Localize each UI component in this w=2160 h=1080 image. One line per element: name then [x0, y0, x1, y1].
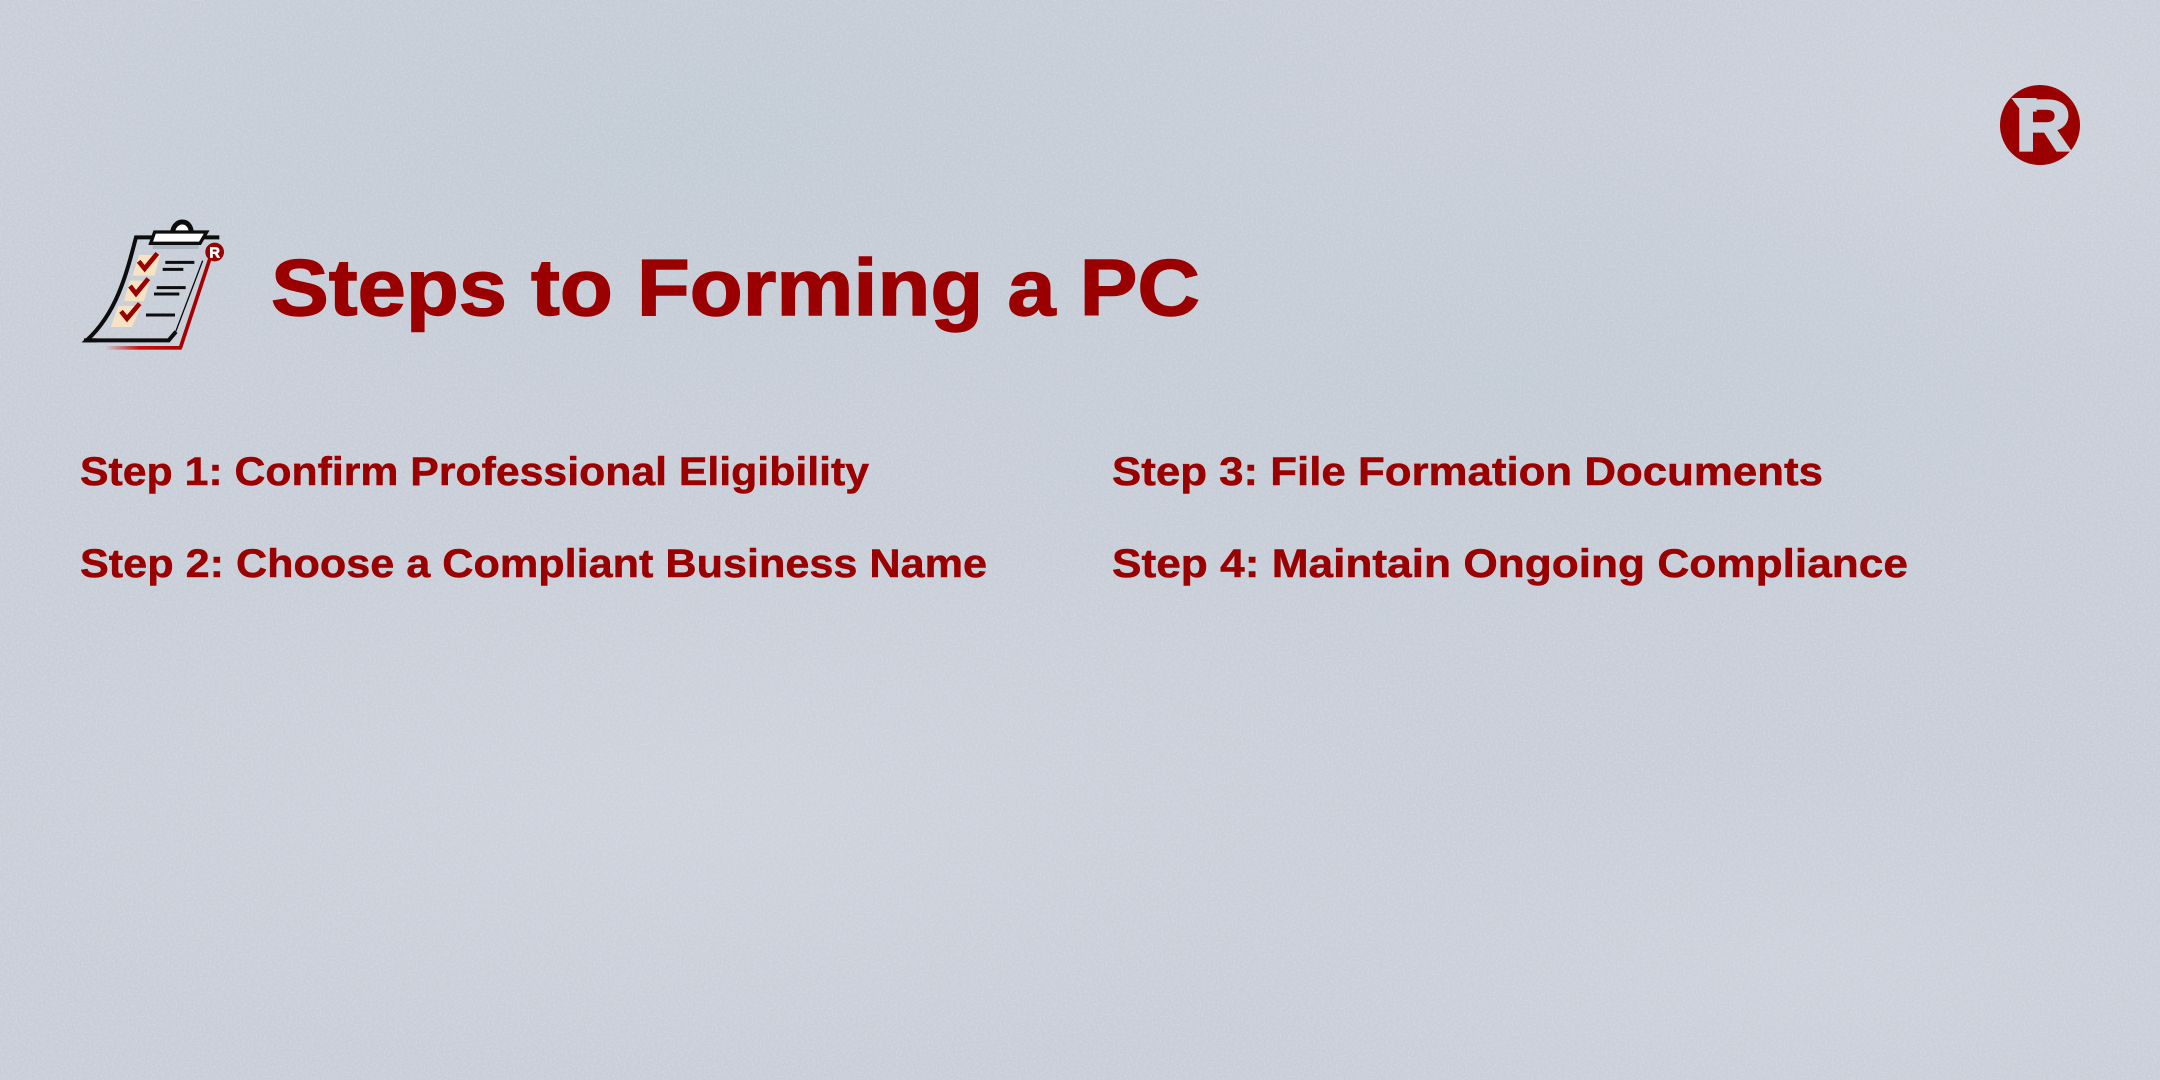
- list lines: [146, 262, 194, 315]
- clip: [151, 222, 207, 249]
- red shadow edge: [105, 258, 210, 350]
- step 3: Step 3: File Formation Documents: [1112, 450, 1823, 494]
- title: Steps to Forming a PC: [271, 243, 1200, 332]
- step 4: Step 4: Maintain Ongoing Compliance: [1112, 542, 1908, 586]
- checkbox backgrounds: [133, 255, 160, 276]
- badge R: R: [209, 245, 220, 261]
- icon: clipboard checklist: [82, 220, 224, 350]
- logo: red circle R: [2000, 85, 2080, 167]
- steps column right: [1112, 450, 1908, 586]
- steps column left: [80, 450, 987, 586]
- clipboard sheet outline: [84, 237, 219, 340]
- check marks: [121, 253, 157, 319]
- badge R: [205, 243, 224, 261]
- step 2: Step 2: Choose a Compliant Business Name: [80, 542, 987, 586]
- step 1: Step 1: Confirm Professional Eligibility: [80, 450, 870, 494]
- logo: red circle R: R: [2015, 87, 2071, 167]
